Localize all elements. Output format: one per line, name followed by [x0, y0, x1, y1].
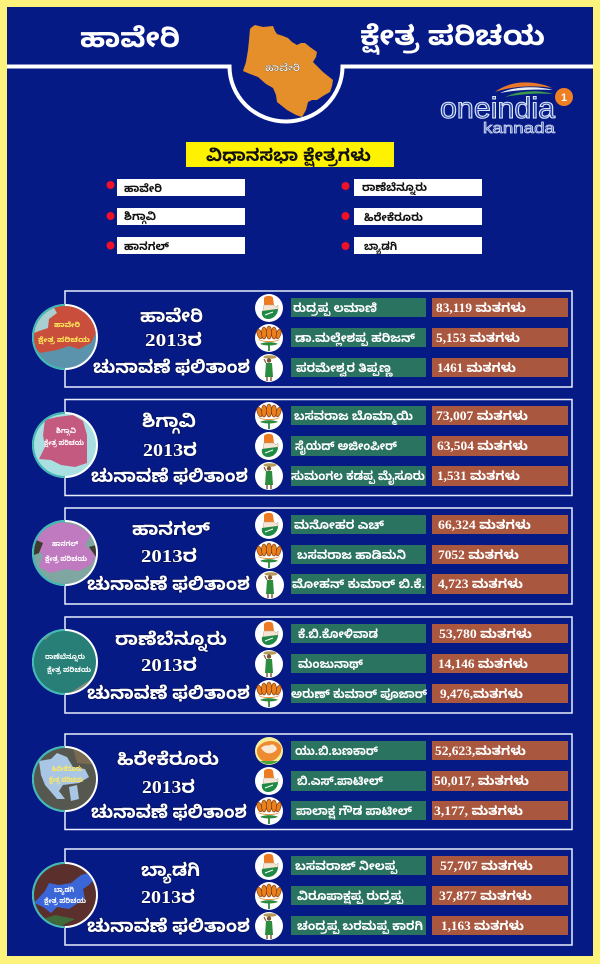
badge: Haveri: ಹಾವೇರಿ — [54, 321, 80, 329]
row: Arun Kumar: ಅರುಣ್ ಕುಮಾರ್ ಪೂಜಾರ್ — [291, 687, 427, 701]
row: Rudrappa Lamani: ರುದ್ರಪ್ಪ ಲಮಾಣಿ — [293, 301, 377, 317]
year: 2013ರ — [141, 546, 197, 566]
election results label: ಚುನಾವಣೆ ಫಲಿತಾಂಶ — [87, 683, 250, 703]
row: Hadimani: ಬಸವರಾಜ ಹಾಡಿಮನಿ — [297, 548, 406, 562]
row: Hadimani — [255, 541, 568, 569]
year: 2013ರ — [142, 777, 195, 797]
logo: oneindia kannada — [440, 82, 573, 137]
row: Rudrappa Lamani — [255, 294, 568, 322]
row: Manjunath — [255, 650, 568, 678]
row: UB Banakar: 52,623,ಮತಗಳು — [435, 744, 526, 758]
panel: Hirekerur — [32, 734, 572, 830]
badge: Byadgi: ಬ್ಯಾಡಗಿ — [54, 886, 74, 895]
row: Palaksha — [255, 797, 568, 825]
row: Bommai: ಬಸವರಾಜ ಬೊಮ್ಮಾಯಿ — [294, 409, 413, 425]
row: Mallesh: ಡಾ.ಮಲ್ಲೇಶಪ್ಪ ಹರಿಜನ್ — [295, 331, 415, 347]
heading: assembly constituencies: ವಿಧಾನಸಭಾ ಕ್ಷೇತ್ರಗಳು — [206, 146, 371, 168]
row: Manohar: 66,324 ಮತಗಳು — [438, 518, 531, 532]
row: Manohar: ಮನೋಹರ ಎಚ್ — [294, 518, 385, 532]
row: Chandrappa: 1,163 ಮತಗಳು — [441, 919, 524, 933]
row: Manjunath: ಮಂಜುನಾಥ್ — [298, 657, 364, 671]
heading: Ranebennur: ರಾಣೆಬೆನ್ನೂರು — [115, 629, 227, 652]
row: Basavaraj Neelappa — [255, 852, 568, 880]
list item: Ranebennur: ರಾಣೆಬೆನ್ನೂರು — [362, 182, 427, 196]
list item: Ranebennur — [342, 179, 482, 196]
badge: Hirekerur: ಹಿರೇಕೆರೂರು — [52, 765, 82, 773]
row: Mallesh — [255, 324, 568, 352]
heading: Haveri: ಹಾವೇರಿ — [140, 306, 203, 326]
year: 2013ರ — [143, 440, 197, 460]
row: Sumangala: ಸುಮಂಗಲ ಕಡಪ್ಪ ಮೈಸೂರು — [291, 469, 425, 486]
year: 2013ರ — [145, 330, 202, 350]
row: Syed Azeempeer: ಸೈಯದ್ ಅಜೀಂಪೀರ್ — [295, 439, 397, 456]
badge: Shiggaon — [32, 412, 98, 478]
election results label: ಚುನಾವಣೆ ಫಲಿತಾಂಶ — [91, 802, 247, 822]
title: left: ಹಾವೇರಿ — [80, 23, 180, 53]
year: 2013ರ — [141, 887, 195, 907]
panel: Hangal — [32, 508, 572, 604]
row: Arun Kumar: 9,476,ಮತಗಳು — [440, 687, 523, 701]
row: UB Banakar — [255, 737, 568, 765]
map: Haveri district — [243, 25, 333, 117]
list item: Hirekerur: ಹಿರೇಕೆರೂರು — [364, 212, 423, 224]
badge: Haveri: ಕ್ಷೇತ್ರ ಪರಿಚಯ — [38, 336, 90, 345]
row: Mallesh: 5,153 ಮತಗಳು — [436, 331, 520, 345]
panel: Ranebennur — [32, 617, 572, 713]
list item: Hirekerur — [342, 208, 482, 225]
row: Basavaraj Neelappa: ಬಸವರಾಜ್ ನೀಲಪ್ಪ — [295, 859, 398, 875]
badge: Hirekerur — [32, 746, 98, 812]
row: UB Banakar: ಯು.ಬಿ.ಬಣಕಾರ್ — [295, 744, 378, 758]
row: Mohan Kumar: 4,723 ಮತಗಳು — [438, 577, 523, 591]
list item: Hangal — [106, 237, 245, 254]
heading: assembly constituencies — [186, 142, 394, 168]
row: Palaksha: ಪಾಲಾಕ್ಷ ಗೌಡ ಪಾಟೀಲ್ — [296, 804, 412, 820]
row: KB Koliwad: ಕೆ.ಬಿ.ಕೋಳಿವಾಡ — [298, 627, 378, 641]
row: Syed Azeempeer: 63,504 ಮತಗಳು — [437, 439, 528, 453]
election results label: ಚುನಾವಣೆ ಫಲಿತಾಂಶ — [93, 357, 250, 377]
heading: Byadgi: ಬ್ಯಾಡಗಿ — [141, 860, 200, 884]
badge: Haveri — [32, 304, 98, 370]
list item: Shiggaon: ಶಿಗ್ಗಾವಿ — [124, 211, 156, 225]
row: Rudrappa Lamani: 83,119 ಮತಗಳು — [436, 301, 526, 315]
row: Virupakshappa — [255, 882, 568, 910]
logo: oneindia kannada: oneindia — [440, 92, 555, 125]
list item: Hangal: ಹಾನಗಲ್ — [124, 241, 170, 253]
row: Parameshwara: ಪರಮೇಶ್ವರ ತಿಪ್ಪಣ್ಣ — [296, 361, 393, 377]
row: Parameshwara — [255, 354, 568, 382]
row: Sumangala: 1,531 ಮತಗಳು — [437, 469, 520, 483]
logo: oneindia kannada: kannada — [483, 120, 556, 137]
logo: oneindia kannada: 1 — [561, 92, 567, 104]
panel: Byadgi — [32, 849, 572, 945]
list item: Shiggaon — [106, 208, 245, 225]
row: Arun Kumar — [255, 680, 568, 708]
row: Virupakshappa: 37,877 ಮತಗಳು — [439, 889, 532, 903]
list item: Byadgi: ಬ್ಯಾಡಗಿ — [364, 241, 397, 255]
header white line and arc — [7, 66, 593, 121]
heading: Shiggaon: ಶಿಗ್ಗಾವಿ — [142, 411, 196, 434]
row: Palaksha: 3,177, ಮತಗಳು — [434, 804, 523, 818]
title: right: ಕ್ಷೇತ್ರ ಪರಿಚಯ — [360, 21, 545, 55]
badge: Shiggaon: ಕ್ಷೇತ್ರ ಪರಿಚಯ — [44, 439, 84, 448]
row: Bommai — [255, 402, 568, 430]
row: Mohan Kumar: ಮೋಹನ್ ಕುಮಾರ್ ಬಿ.ಕೆ. — [292, 577, 425, 591]
election results label: ಚುನಾವಣೆ ಫಲಿತಾಂಶ — [91, 466, 248, 486]
row: BS Patil — [255, 767, 568, 795]
election results label: ಚುನಾವಣೆ ಫಲಿತಾಂಶ — [87, 574, 250, 594]
row: Chandrappa — [255, 912, 568, 940]
list: constituencies — [106, 179, 482, 255]
row: KB Koliwad: 53,780 ಮತಗಳು — [439, 627, 532, 641]
list item: Haveri: ಹಾವೇರಿ — [124, 183, 162, 195]
badge: Hangal — [32, 520, 98, 586]
badge: Hirekerur: ಕ್ಷೇತ್ರ ಪರಿಚಯ — [49, 776, 83, 785]
row: Syed Azeempeer — [255, 432, 568, 460]
row: Sumangala — [255, 462, 568, 490]
row: Manjunath: 14,146 ಮತಗಳು — [438, 657, 528, 671]
list item: Haveri — [106, 179, 245, 196]
row: Bommai: 73,007 ಮತಗಳು — [436, 409, 528, 423]
badge: Ranebennur — [32, 629, 98, 695]
row: BS Patil: 50,017, ಮತಗಳು — [434, 774, 529, 788]
list item: Byadgi — [342, 237, 482, 255]
row: Hadimani: 7052 ಮತಗಳು — [438, 548, 519, 562]
heading: Hangal: ಹಾನಗಲ್ — [132, 519, 211, 539]
row: Virupakshappa: ವಿರೂಪಾಕ್ಷಪ್ಪ ರುದ್ರಪ್ಪ — [297, 889, 404, 905]
panel: Shiggaon — [32, 400, 572, 496]
heading: Hirekerur: ಹಿರೇಕೆರೂರು — [117, 749, 219, 769]
badge: Byadgi — [32, 862, 98, 928]
badge: Byadgi: ಕ್ಷೇತ್ರ ಪರಿಚಯ — [44, 897, 86, 906]
row: Chandrappa: ಚಂದ್ರಪ್ಪ ಬರಮಪ್ಪ ಕಾರಗಿ — [297, 919, 423, 935]
badge: Hangal: ಹಾನಗಲ್ — [52, 540, 78, 548]
row: KB Koliwad — [255, 620, 568, 648]
row: Mohan Kumar — [256, 571, 568, 599]
panel: Haveri — [32, 291, 572, 387]
row: Basavaraj Neelappa: 57,707 ಮತಗಳು — [440, 859, 533, 873]
badge: Hangal: ಕ್ಷೇತ್ರ ಪರಿಚಯ — [45, 555, 87, 564]
badge: Shiggaon: ಶಿಗ್ಗಾವಿ — [56, 427, 77, 436]
badge: Ranebennur: ರಾಣೆಬೆನ್ನೂರು — [45, 653, 85, 662]
row: Parameshwara: 1461 ಮತಗಳು — [437, 361, 516, 375]
row: BS Patil: ಬಿ.ಎಸ್.ಪಾಟೀಲ್ — [297, 774, 383, 788]
map: Haveri district: ಹಾವೇರಿ — [265, 62, 300, 74]
election results label: ಚುನಾವಣೆ ಫಲಿತಾಂಶ — [87, 916, 250, 936]
row: Manohar — [255, 511, 568, 539]
year: 2013ರ — [141, 655, 197, 675]
badge: Ranebennur: ಕ್ಷೇತ್ರ ಪರಿಚಯ — [47, 666, 91, 675]
